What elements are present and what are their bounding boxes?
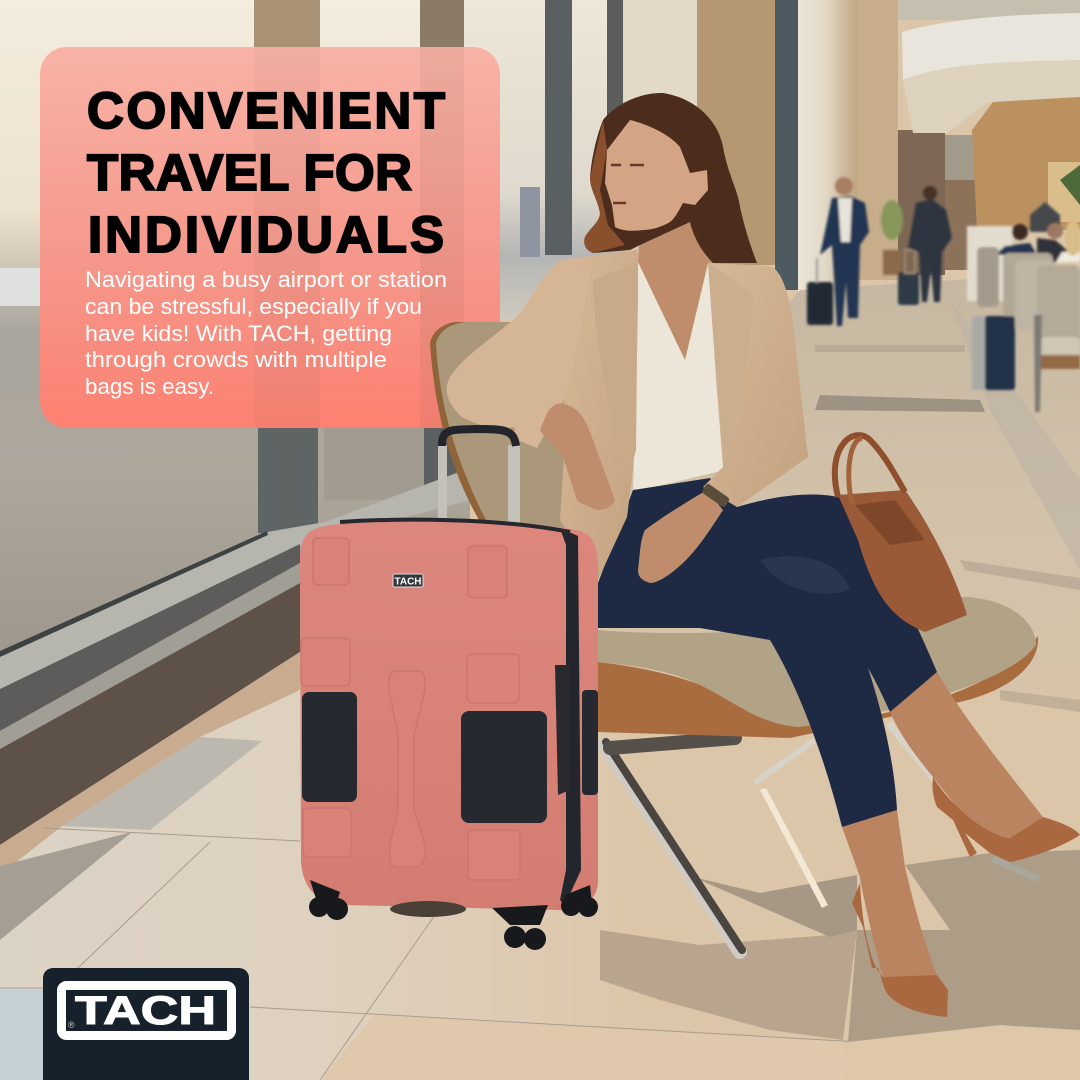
body text <box>85 267 447 399</box>
title: CONVENIENT <box>87 82 445 139</box>
window mullions <box>254 0 624 533</box>
eyes and lips <box>611 165 644 203</box>
near hand <box>540 403 615 510</box>
indoor plant <box>881 200 903 275</box>
chair back <box>436 322 570 528</box>
seated passengers <box>995 202 1080 262</box>
logo outline <box>62 986 232 1036</box>
telescopic handle <box>438 429 520 525</box>
hair front, warm side <box>584 120 625 253</box>
tile below suitcase <box>320 1015 845 1080</box>
far leg <box>890 672 1043 838</box>
logo wordmark: TACH <box>75 989 216 1033</box>
traveler with suitcase, left <box>807 177 869 326</box>
blazer torso <box>560 250 638 580</box>
TACH logo badge <box>43 968 249 1080</box>
black grip, right <box>582 690 598 795</box>
main floor <box>0 652 1080 1080</box>
floor shadows under chair <box>600 930 857 1040</box>
hair back <box>584 93 757 263</box>
near shoe <box>852 883 948 1017</box>
side handle <box>555 665 570 795</box>
embossed panels <box>301 538 520 880</box>
registered mark: ® <box>68 1020 75 1030</box>
blouse <box>633 262 725 492</box>
lounge chair <box>430 322 1038 952</box>
face <box>605 120 708 231</box>
terminal columns <box>623 0 977 295</box>
suitcase <box>300 429 598 950</box>
body text: through crowds with multiple <box>85 347 387 372</box>
hall floor <box>610 272 1080 1080</box>
handbag <box>835 435 967 632</box>
far shoe <box>932 777 1080 862</box>
window view <box>0 0 470 660</box>
trousers <box>598 478 937 827</box>
title: INDIVIDUALS <box>88 206 444 263</box>
blazer sleeve <box>447 260 590 448</box>
chest and neck <box>638 218 708 360</box>
waiting seats <box>977 247 1080 412</box>
traveler with suitcase, right <box>898 186 952 305</box>
body text: have kids! With TACH, getting <box>85 321 392 346</box>
panel: headline card <box>40 47 500 428</box>
title <box>87 82 445 263</box>
body text: bags is easy. <box>85 374 214 399</box>
chair seat <box>598 597 1036 727</box>
window sill <box>0 468 470 689</box>
chair wood shell <box>598 636 1038 738</box>
distant airplane <box>0 268 40 306</box>
balcony and wood wall <box>898 0 1080 230</box>
card background <box>40 47 500 428</box>
near leg <box>842 810 937 977</box>
sleeve cuff detail <box>509 427 515 433</box>
body text: can be stressful, especially if you <box>85 294 422 319</box>
blazer right side <box>703 263 808 507</box>
body text: Navigating a busy airport or station <box>85 267 447 292</box>
watch <box>701 483 730 508</box>
tile lines <box>0 828 860 1080</box>
chair shell edge <box>430 322 490 525</box>
chair legs <box>604 725 1036 952</box>
case logo: TACH <box>394 576 422 588</box>
black grip, centre <box>461 711 547 823</box>
woman <box>447 93 1080 1017</box>
case body <box>300 520 598 910</box>
window glass, upper right <box>464 0 624 320</box>
large suitcase <box>972 316 1015 390</box>
wall glow and reflections <box>0 652 300 875</box>
background travelers <box>807 177 1080 412</box>
far hand <box>638 490 723 583</box>
title: TRAVEL FOR <box>87 144 412 201</box>
side zipper <box>560 528 581 905</box>
reception desk <box>967 226 1012 301</box>
wheels <box>309 880 598 950</box>
zipper top <box>340 520 570 532</box>
black grip, left <box>302 692 357 802</box>
